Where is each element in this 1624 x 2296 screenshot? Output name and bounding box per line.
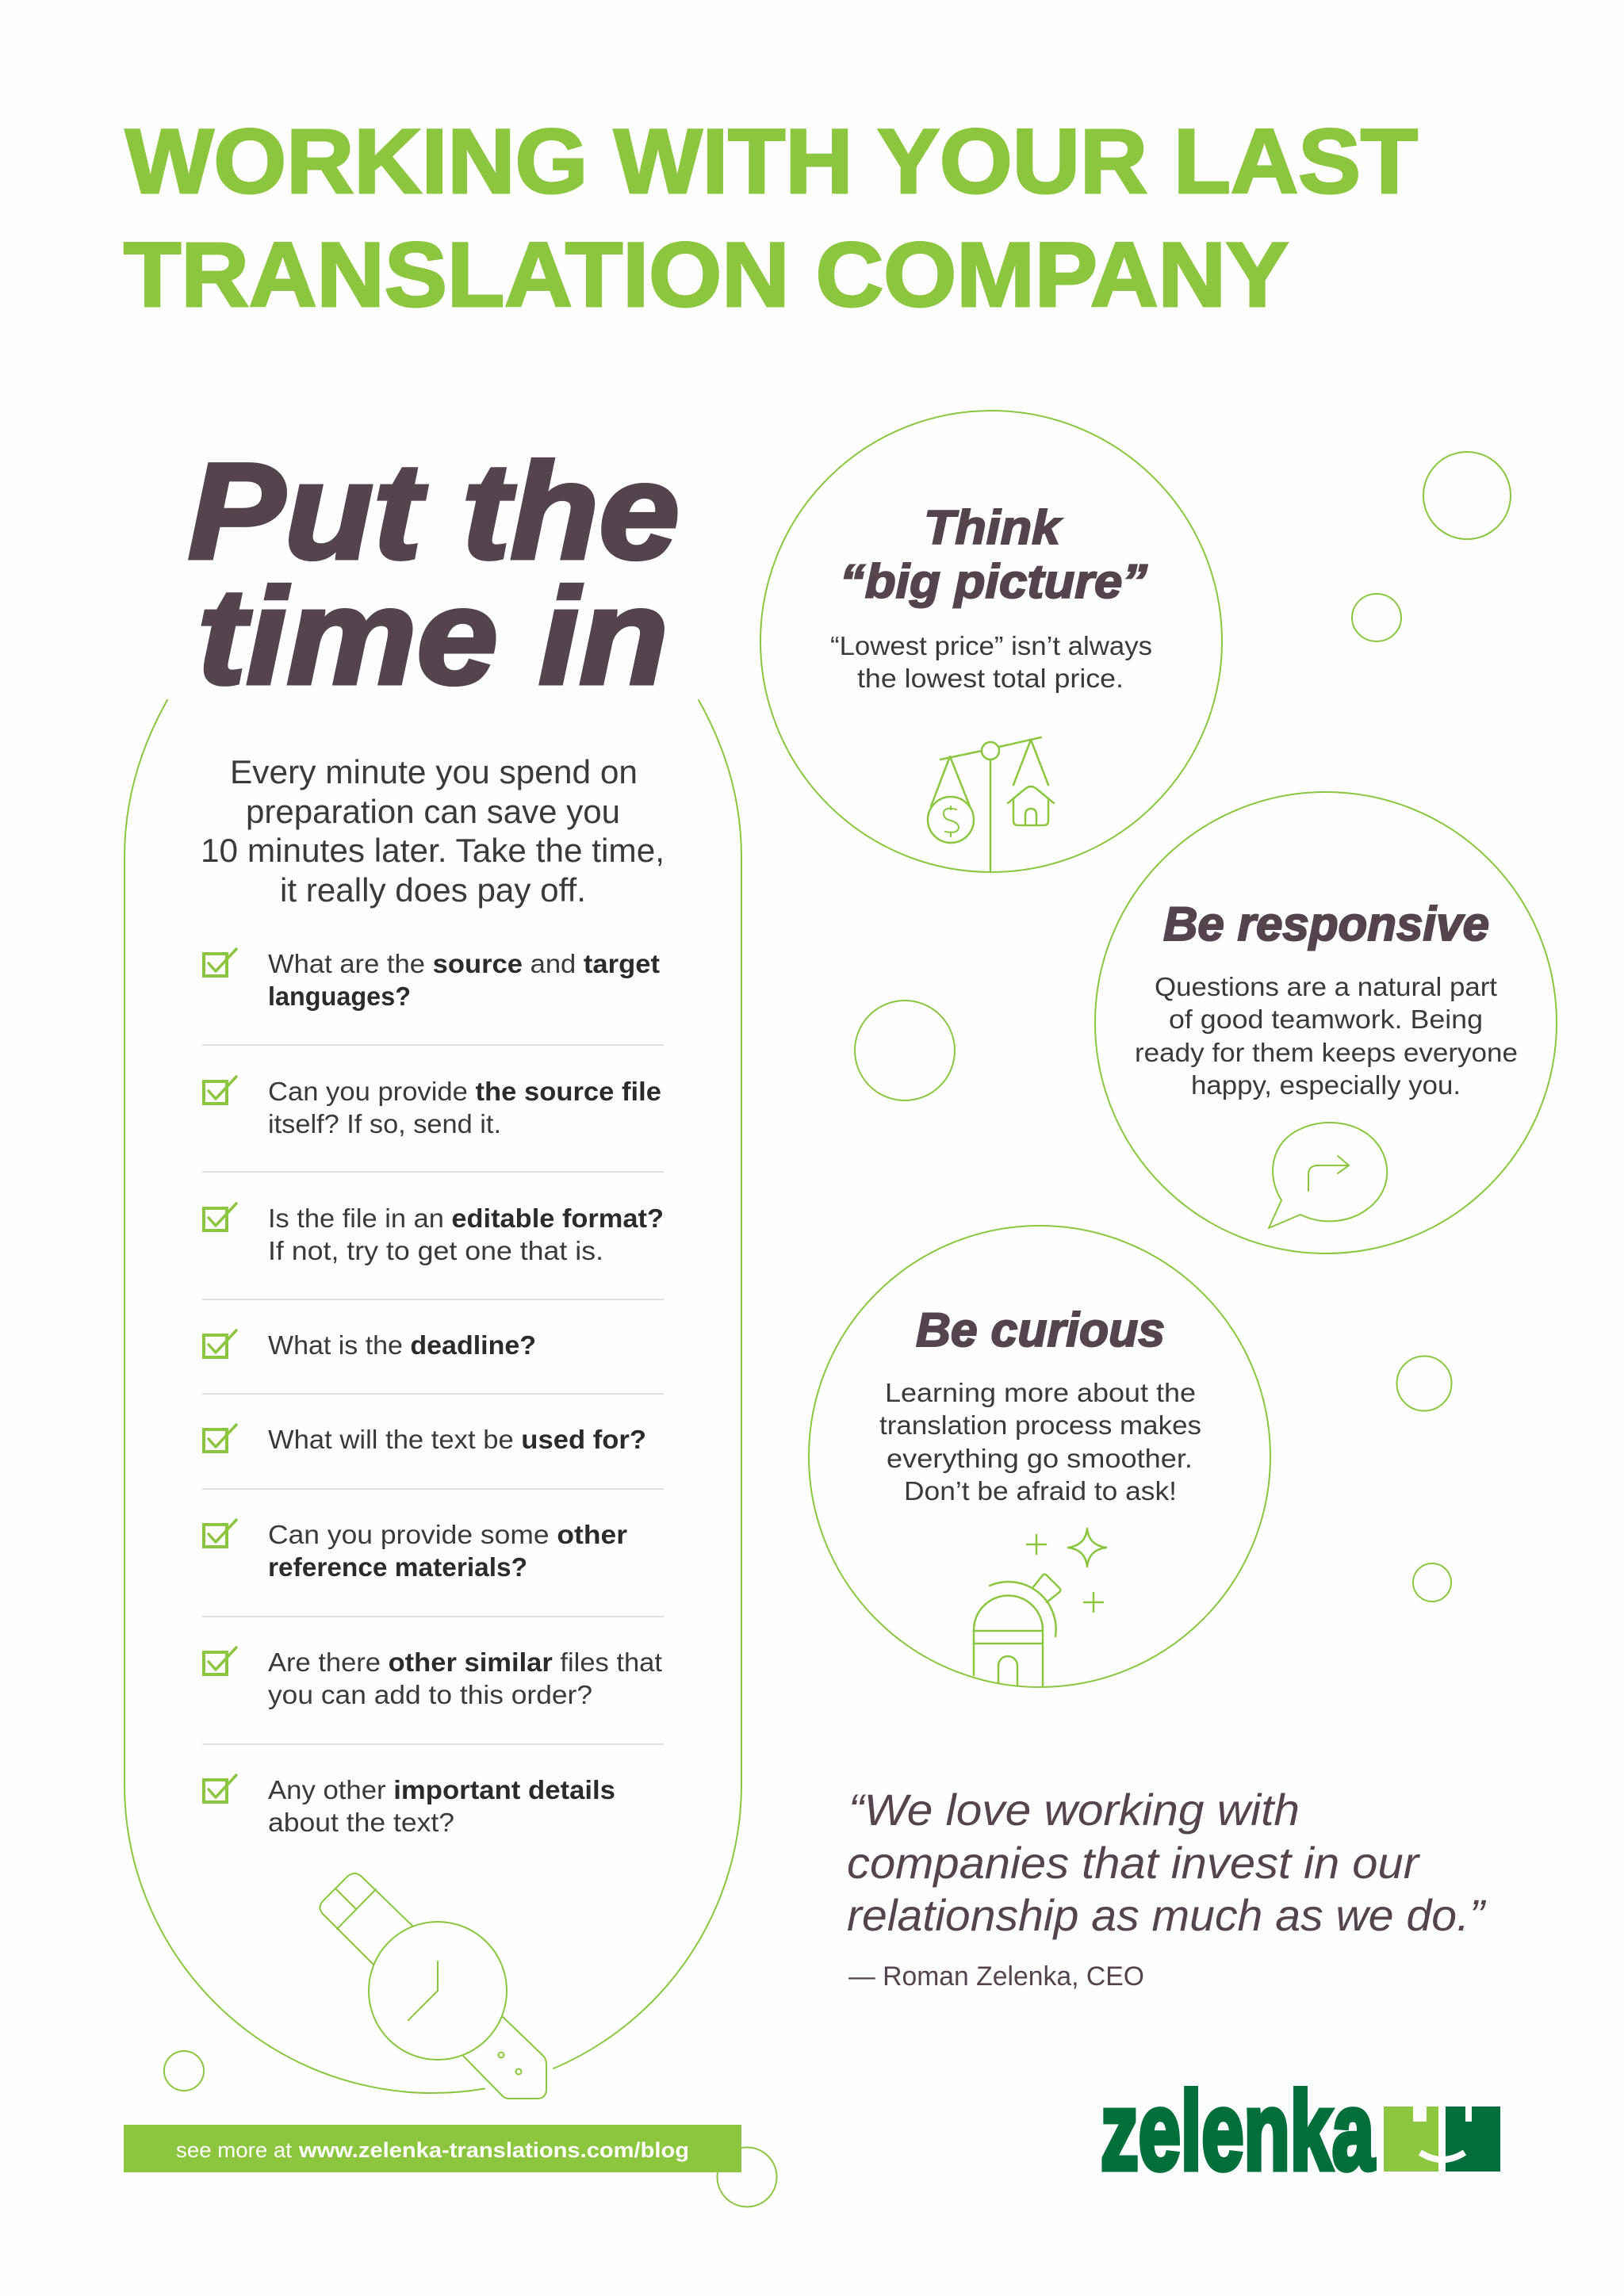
checklist item 5: What will the text be used for? [268, 1425, 646, 1454]
quote: “We love working with [848, 1785, 1300, 1835]
heading: be responsive: Be responsive [1163, 897, 1489, 951]
checklist item 8: Any other important details [268, 1775, 615, 1804]
checklist item 3: Is the file in an editable format? [268, 1203, 664, 1233]
quote: companies that invest in our [847, 1838, 1420, 1888]
body text: ready for them keeps everyone [1135, 1038, 1518, 1067]
footer bar [124, 2125, 741, 2172]
checklist item 6: Can you provide some other [268, 1520, 627, 1549]
heading: put the time in: Put the [188, 435, 680, 587]
checklist item 1 [204, 949, 660, 1011]
icon: speech bubble with arrow [1269, 1123, 1387, 1228]
intro text: preparation can save you [246, 793, 620, 830]
intro text [201, 753, 665, 909]
body text: happy, especially you. [1191, 1070, 1461, 1100]
checklist item 8 [204, 1775, 615, 1837]
checklist item 1: What are the source and target [268, 949, 660, 978]
body text: of good teamwork. Being [1169, 1004, 1483, 1034]
icon: watch [320, 1873, 546, 2099]
title: WORKING WITH YOUR LAST [125, 111, 1418, 212]
body text [830, 631, 1152, 693]
heading: put the time in [188, 435, 680, 713]
panel: think big picture [760, 411, 1222, 872]
intro text: Every minute you spend on [230, 753, 638, 790]
decorative bubble [855, 1001, 955, 1100]
quote attribution: — Roman Zelenka, CEO [848, 1961, 1144, 1992]
heading: think big picture [840, 501, 1147, 608]
decorative bubble, bottom left [164, 2051, 204, 2091]
decorative bubble behind footer bar [717, 2147, 777, 2207]
panel: be curious [809, 1226, 1270, 1687]
decorative bubble [1413, 1563, 1451, 1601]
body text: everything go smoother. [887, 1444, 1193, 1473]
checklist item 7: Are there other similar files that [268, 1647, 662, 1677]
body text [879, 1378, 1201, 1506]
body text: Questions are a natural part [1155, 972, 1497, 1001]
panel: put the time in [124, 435, 741, 2099]
checklist item 3 [204, 1203, 664, 1265]
body text: translation process makes [879, 1410, 1201, 1440]
checklist item 7 [204, 1647, 662, 1709]
icon: observatory [974, 1529, 1106, 1686]
heading: think big picture: “big picture” [840, 555, 1147, 608]
heading: be curious: Be curious [916, 1303, 1165, 1357]
body text: Learning more about the [885, 1378, 1196, 1407]
title: TRANSLATION COMPANY [124, 224, 1289, 326]
checklist item 3: If not, try to get one that is. [268, 1236, 603, 1265]
intro text: 10 minutes later. Take the time, [201, 832, 665, 869]
heading: put the time in: time in [197, 561, 668, 713]
checklist item 6: reference materials? [268, 1552, 527, 1582]
logo: zelenka: zelenka [1101, 2068, 1375, 2193]
decorative bubble [1352, 594, 1401, 641]
panel: be responsive [1095, 792, 1557, 1253]
decorative bubble [1397, 1356, 1451, 1411]
body text: the lowest total price. [857, 664, 1124, 693]
body text [1135, 972, 1518, 1100]
checklist item 2 [204, 1077, 661, 1138]
checklist item 4: What is the deadline? [268, 1330, 536, 1360]
heading: think big picture: Think [924, 501, 1063, 554]
checklist item 2: Can you provide the source file [268, 1077, 661, 1106]
body text: Don’t be afraid to ask! [904, 1476, 1177, 1506]
checklist item 2: itself? If so, send it. [268, 1109, 501, 1138]
footer bar: see more at [176, 2138, 292, 2162]
footer bar: www.zelenka-translations.com/blog [298, 2138, 689, 2162]
icon: scales [928, 737, 1054, 871]
quote [847, 1785, 1486, 1940]
checklist item 8: about the text? [268, 1808, 454, 1837]
title [124, 111, 1418, 326]
body text: “Lowest price” isn’t always [830, 631, 1152, 660]
checklist item 7: you can add to this order? [268, 1680, 592, 1709]
quote: relationship as much as we do.” [847, 1890, 1486, 1940]
checklist item 6 [204, 1520, 627, 1582]
decorative bubble [1423, 452, 1511, 539]
checklist item 1: languages? [268, 982, 411, 1011]
intro text: it really does pay off. [280, 871, 586, 909]
